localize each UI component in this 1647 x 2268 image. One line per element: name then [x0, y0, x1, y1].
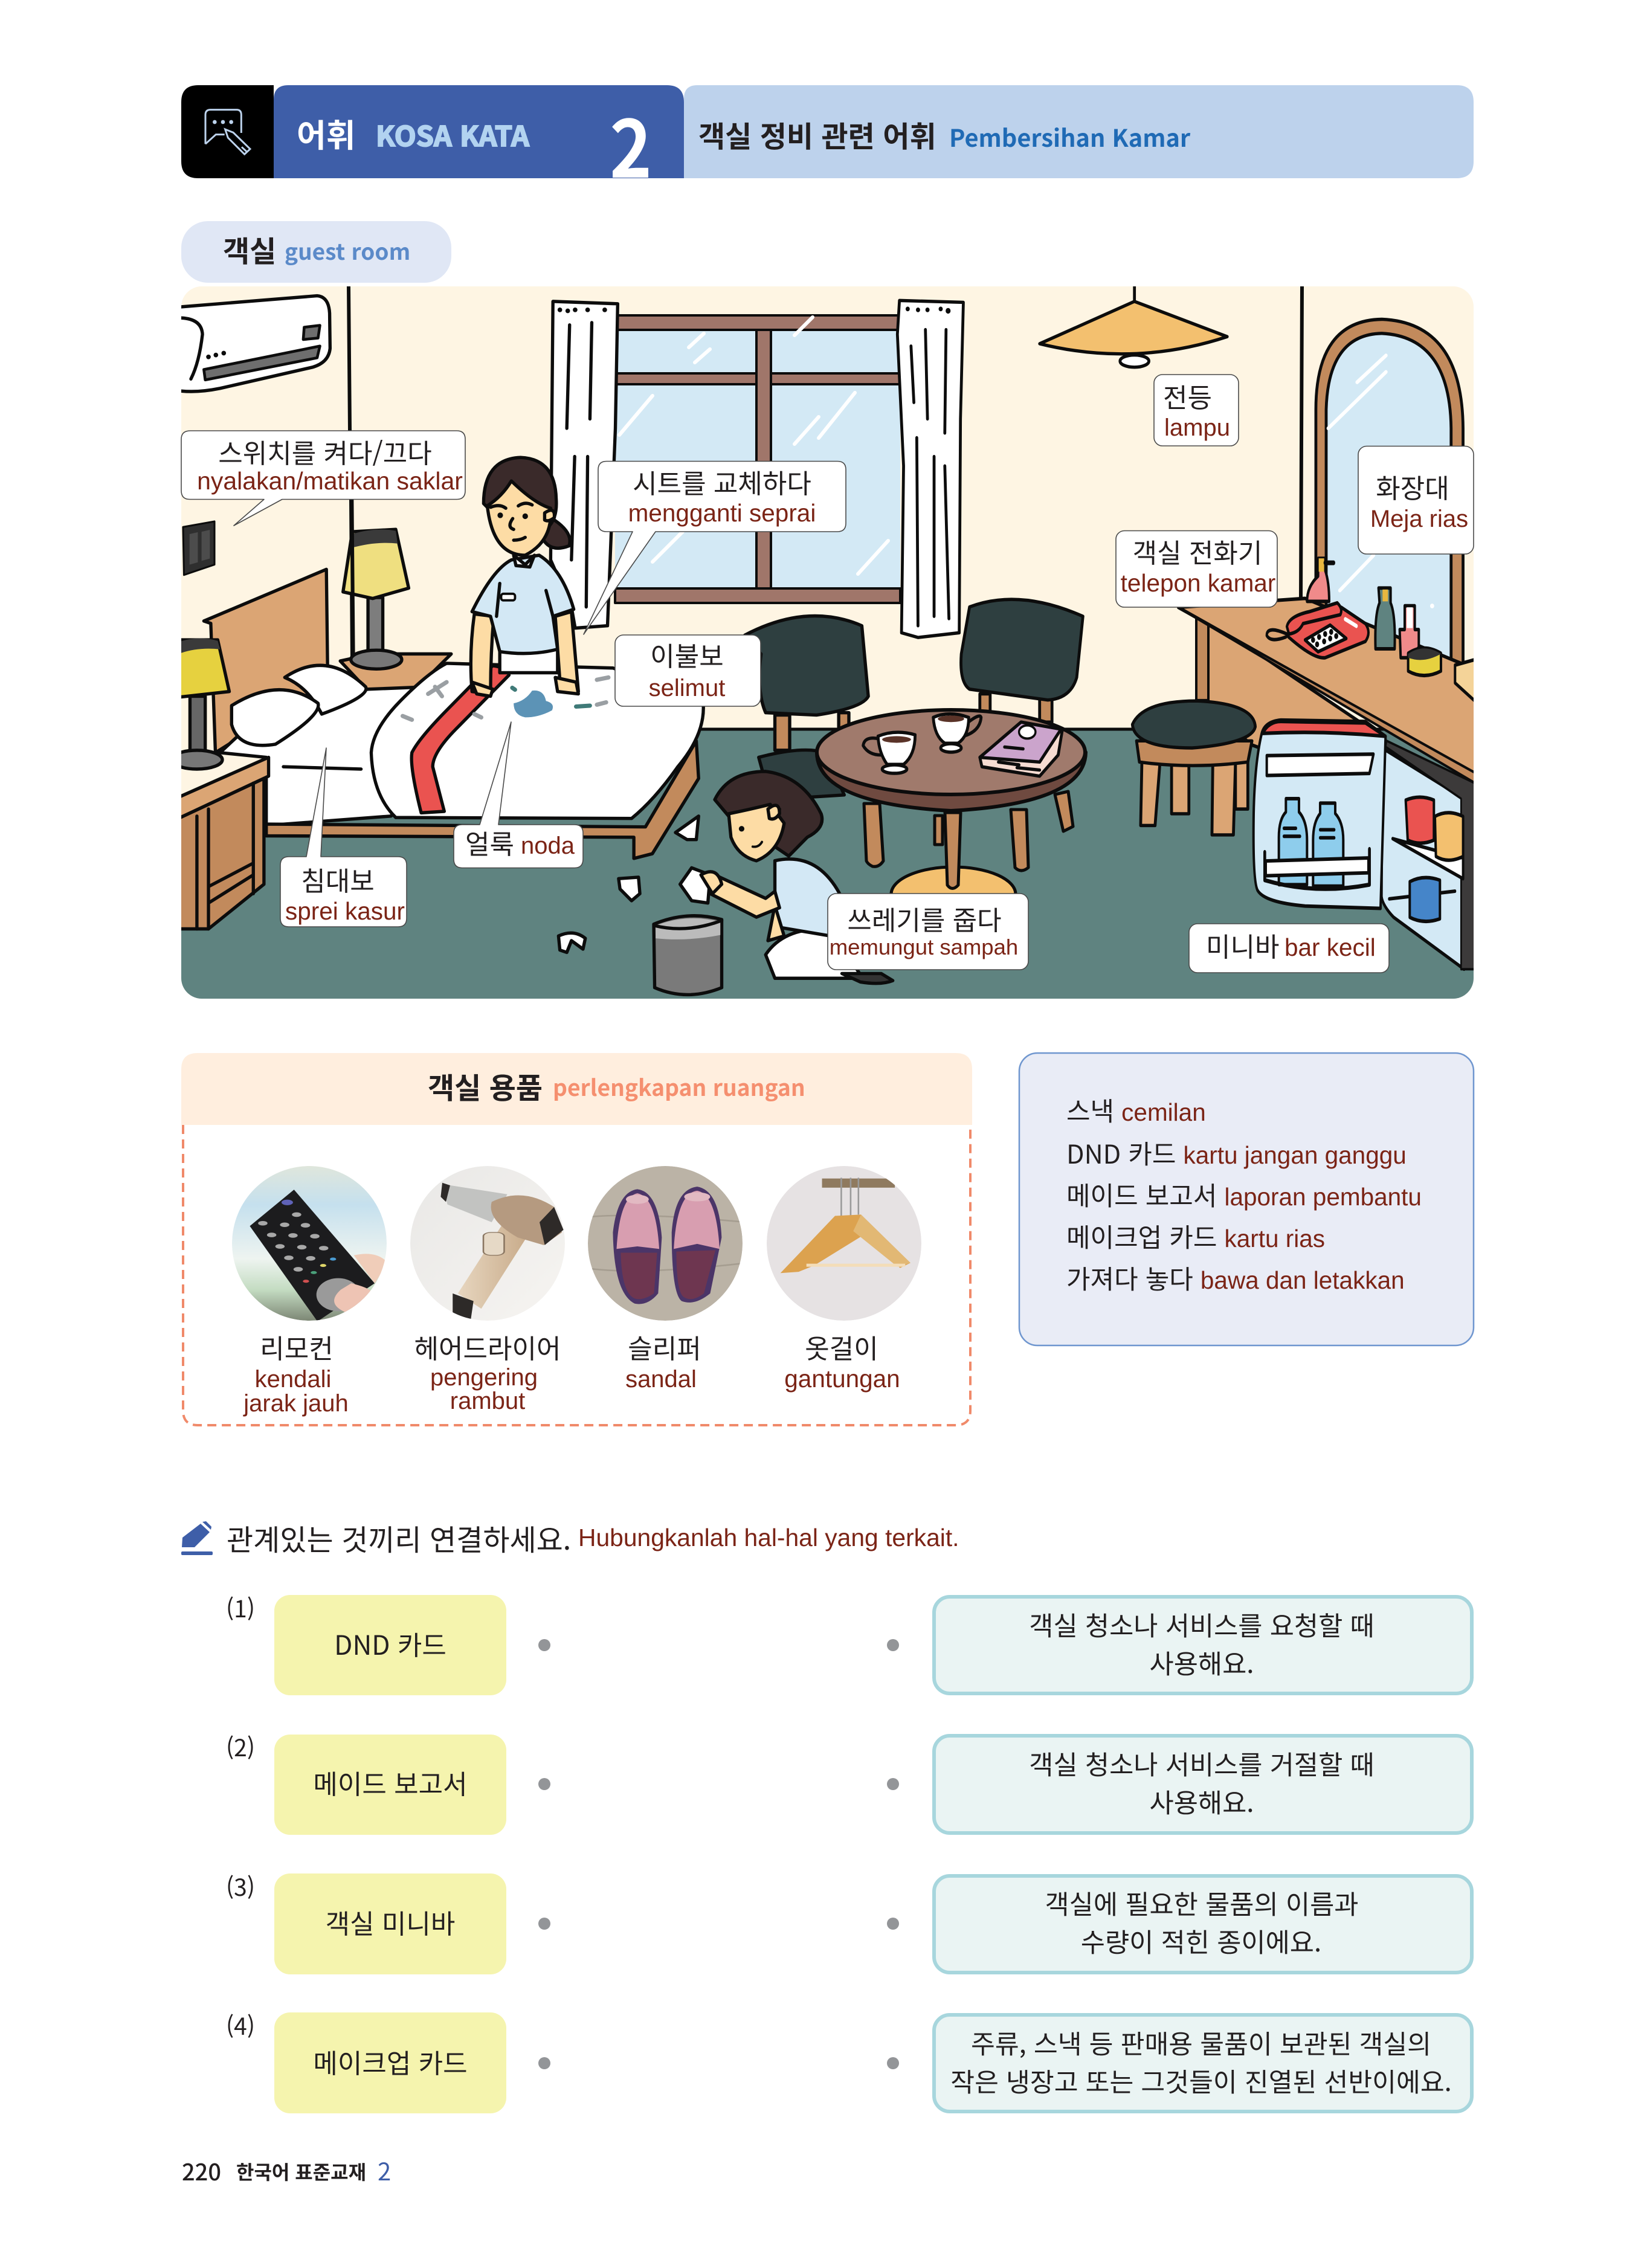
mirror: [1316, 319, 1463, 668]
page footer: 220: [182, 2154, 221, 2187]
callout: pick up trash: memungut sampah: [830, 935, 1018, 959]
mattress: [219, 686, 414, 823]
panel: extra vocabulary: 가져다 놓다 bawa dan letakkan: [1066, 1259, 1405, 1297]
window: [615, 315, 900, 603]
row 2: 객실 청소나 서비스를 거절할 때: [1029, 1744, 1375, 1782]
light switch: [183, 521, 214, 575]
row 2: 메이드 보고서: [313, 1763, 468, 1802]
vocabulary label tab: 어휘: [297, 111, 356, 156]
rug and table: [817, 710, 1086, 921]
panel header: 객실 용품: [428, 1065, 543, 1107]
panel: extra vocabulary: 메이드 보고서 laporan pembantu: [1066, 1176, 1422, 1213]
row 4: 주류, 스낵 등 판매용 물품이 보관된 객실의: [971, 2024, 1431, 2061]
cosmetics: [1375, 588, 1395, 649]
panel: extra vocabulary: 스낵 cemilan: [1066, 1091, 1206, 1129]
section title tab: [684, 85, 1474, 178]
chair left: [745, 616, 868, 800]
row 2: 사용해요.: [1150, 1782, 1254, 1820]
callout: bed sheet: [280, 748, 407, 927]
pillows: [285, 665, 366, 714]
row 4: [226, 2008, 1472, 2113]
callout: room telephone: 객실 전화기: [1133, 532, 1262, 570]
fridge body: [1254, 720, 1385, 909]
row 3: (3): [226, 1869, 255, 1903]
paper scraps and trash can: [558, 816, 722, 994]
section title tab: 객실 정비 관련 어휘: [698, 113, 936, 155]
callout: vanity: 화장대: [1376, 467, 1449, 506]
exercise heading: Hubungkanlah hal-hal yang terkait.: [578, 1524, 959, 1551]
desk underside and leg: [1196, 612, 1385, 748]
item: remote control: kendali: [255, 1366, 331, 1393]
row 4: 메이크업 카드: [313, 2042, 468, 2081]
row 1: DND 카드: [334, 1624, 446, 1663]
red telephone: [1267, 630, 1287, 640]
item: slippers: sandal: [625, 1366, 697, 1393]
housekeeper standing: [471, 457, 578, 696]
stains on blanket: [402, 677, 608, 720]
callout: blanket: [615, 635, 761, 706]
blanket: [371, 663, 703, 819]
item: remote control: 리모컨: [260, 1327, 334, 1366]
guest room heading pill: 객실: [223, 228, 276, 270]
bed group: [172, 499, 703, 929]
callout: switch on/off: 스위치를 켜다/끄다: [218, 432, 432, 471]
air conditioner: [178, 296, 330, 391]
row 1: (1): [226, 1591, 255, 1625]
icon: pencil: [181, 1521, 213, 1555]
item: hair dryer: [410, 1166, 565, 1414]
callout: mini bar: bar kecil: [1284, 933, 1376, 961]
callout: stain: noda: [521, 833, 575, 859]
item: hangers: gantungan: [784, 1365, 900, 1393]
panel header: [181, 1053, 972, 1125]
row 3: [226, 1869, 1472, 1974]
housekeeper crouching with trash: [680, 772, 893, 984]
vanity desk and mini bar: [1178, 558, 1476, 969]
floor: [181, 729, 1474, 999]
row 1: [226, 1591, 1472, 1695]
item: remote control: [232, 1166, 388, 1417]
stool: [1132, 701, 1255, 835]
icon tile: speech bubble with pencil: [181, 85, 274, 178]
item: slippers: 슬리퍼: [628, 1327, 701, 1366]
row 3: 수량이 적힌 종이에요.: [1081, 1921, 1321, 1960]
callout: change sheets: 시트를 교체하다: [633, 462, 811, 501]
ceiling lamp: [1132, 286, 1136, 301]
fridge door: [1382, 748, 1464, 969]
page footer: 한국어 표준교재: [236, 2157, 366, 2185]
page footer: 2: [378, 2153, 391, 2188]
row 2: (2): [226, 1730, 255, 1764]
callout: stain: 얼룩: [465, 823, 514, 862]
panel: extra vocabulary: 메이크업 카드 kartu rias: [1066, 1217, 1325, 1255]
callout: lamp: 전등: [1163, 376, 1212, 415]
row 2: [226, 1730, 1472, 1835]
wall lines: [349, 286, 1302, 659]
vocabulary label tab: [274, 85, 684, 201]
item: hair dryer: 헤어드라이어: [414, 1327, 561, 1366]
exercise heading: [181, 1516, 959, 1559]
row 3: 객실에 필요한 물품의 이름과: [1045, 1883, 1359, 1922]
callout: switch on/off: nyalakan/matikan saklar: [197, 467, 463, 495]
desk top: [1178, 598, 1476, 775]
callout: lamp: lampu: [1164, 414, 1230, 441]
callout: vanity: [1358, 446, 1474, 554]
panel: extra vocabulary: [1019, 1053, 1474, 1345]
illustration: hotel guest room: [172, 286, 1476, 999]
row 1: 객실 청소나 서비스를 요청할 때: [1029, 1605, 1375, 1643]
vocabulary label tab: 2: [610, 86, 652, 201]
callout: mini bar: 미니바: [1206, 926, 1279, 964]
panel: extra vocabulary: DND 카드 kartu jangan ganggu: [1066, 1134, 1407, 1171]
exercise heading: 관계있는 것끼리 연결하세요.: [227, 1516, 571, 1559]
chair right, lamp: [961, 286, 1227, 722]
guest room heading pill: [181, 221, 451, 283]
bed frame: [266, 741, 698, 859]
panel: room supplies: [181, 1053, 972, 1425]
guest room heading pill: guest room: [285, 234, 410, 266]
left curtain: [550, 301, 617, 628]
row 4: 작은 냉장고 또는 그것들이 진열된 선반이에요.: [950, 2062, 1452, 2099]
headboard: [204, 569, 327, 753]
callout: change sheets: mengganti seprai: [628, 499, 816, 527]
panel header: perlengkapan ruangan: [553, 1070, 805, 1103]
callout: blanket: 이불보: [650, 635, 724, 674]
right chair: [980, 694, 1052, 722]
section title tab: Pembersihan Kamar: [949, 120, 1191, 154]
callout: bed sheet: 침대보: [301, 860, 375, 898]
cups and book on table: [863, 714, 1062, 776]
callout: vanity: Meja rias: [1370, 506, 1468, 532]
item: slippers: [585, 1166, 747, 1393]
row 3: 객실 미니바: [326, 1902, 455, 1941]
front bedside lamp: [181, 638, 231, 771]
item: hangers: [767, 1166, 921, 1393]
right curtain: [897, 300, 963, 637]
vocabulary label tab: KOSA KATA: [376, 115, 530, 155]
bedside lamp back: [343, 499, 408, 656]
callout: bed sheet: sprei kasur: [285, 897, 405, 925]
callout: room telephone: telepon kamar: [1121, 569, 1275, 597]
perfume bottle: [1307, 558, 1329, 601]
callout: room telephone: [1116, 530, 1277, 607]
callout: change sheets: [584, 462, 846, 634]
page footer: [182, 2153, 391, 2188]
callout: lamp: [1154, 375, 1239, 446]
front bedside table: [178, 758, 269, 929]
callout: mini bar: [1189, 924, 1389, 973]
bedside table back: [340, 654, 451, 691]
callout: pick up trash: [828, 894, 1028, 970]
item: hair dryer: rambut: [450, 1388, 525, 1414]
item: hangers: 옷걸이: [805, 1327, 878, 1366]
section header bar: [181, 85, 1474, 201]
callout: switch on/off: [181, 431, 465, 526]
wall background: [181, 286, 1474, 729]
item: hair dryer: pengering: [430, 1364, 538, 1391]
matching exercise: [226, 1591, 1472, 2113]
item: remote control: jarak jauh: [243, 1390, 349, 1417]
callout: pick up trash: 쓰레기를 줍다: [847, 899, 1002, 938]
callout: stain: [454, 722, 583, 868]
callout: blanket: selimut: [649, 675, 725, 701]
row 1: 사용해요.: [1150, 1643, 1254, 1681]
row 4: (4): [226, 2008, 255, 2042]
